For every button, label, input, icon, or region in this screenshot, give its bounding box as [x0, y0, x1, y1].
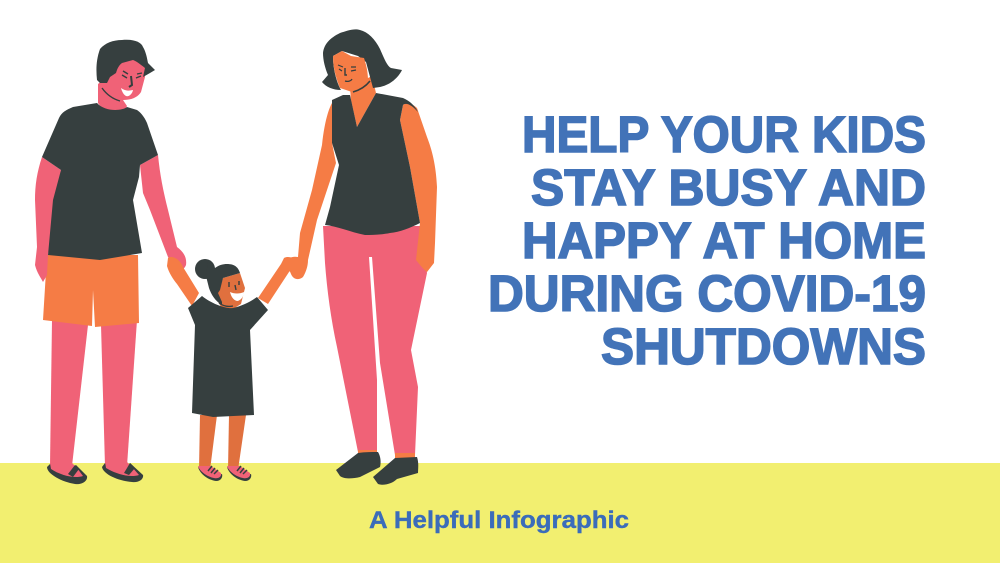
child hair — [195, 259, 240, 305]
woman top — [325, 93, 420, 235]
title: HAPPY AT HOME — [522, 212, 926, 269]
woman face — [333, 51, 368, 92]
man shorts — [43, 255, 139, 327]
title — [488, 106, 926, 375]
man left arm — [35, 157, 61, 282]
man right arm — [140, 155, 186, 270]
subtitle: A Helpful Infographic — [369, 507, 629, 534]
woman shoes — [336, 452, 418, 485]
woman right arm — [400, 103, 437, 272]
child shoes — [198, 466, 251, 481]
woman ankles — [358, 450, 415, 459]
man face details — [102, 71, 142, 101]
man smile — [121, 88, 133, 96]
child smile — [230, 292, 244, 301]
man sandals — [47, 462, 143, 484]
woman neck and chest — [350, 76, 376, 127]
title: DURING COVID-19 — [488, 265, 926, 322]
man legs — [50, 320, 137, 466]
title: HELP YOUR KIDS — [522, 106, 926, 163]
man t-shirt — [42, 103, 158, 260]
figure: woman — [286, 29, 437, 485]
woman hair — [322, 29, 402, 90]
title: STAY BUSY AND — [531, 159, 926, 216]
child face and neck — [216, 273, 245, 309]
woman left arm — [286, 103, 336, 279]
ground band — [0, 463, 1000, 563]
child legs — [199, 415, 246, 470]
child dress — [188, 296, 268, 417]
man neck and face — [98, 58, 145, 110]
figure: man — [35, 40, 186, 484]
woman pants — [323, 226, 427, 455]
man hair — [96, 40, 155, 83]
child face details — [219, 281, 239, 306]
woman face details — [338, 65, 370, 92]
title: SHUTDOWNS — [601, 318, 926, 375]
figure: child — [167, 257, 297, 481]
child arms and hands — [167, 257, 297, 306]
